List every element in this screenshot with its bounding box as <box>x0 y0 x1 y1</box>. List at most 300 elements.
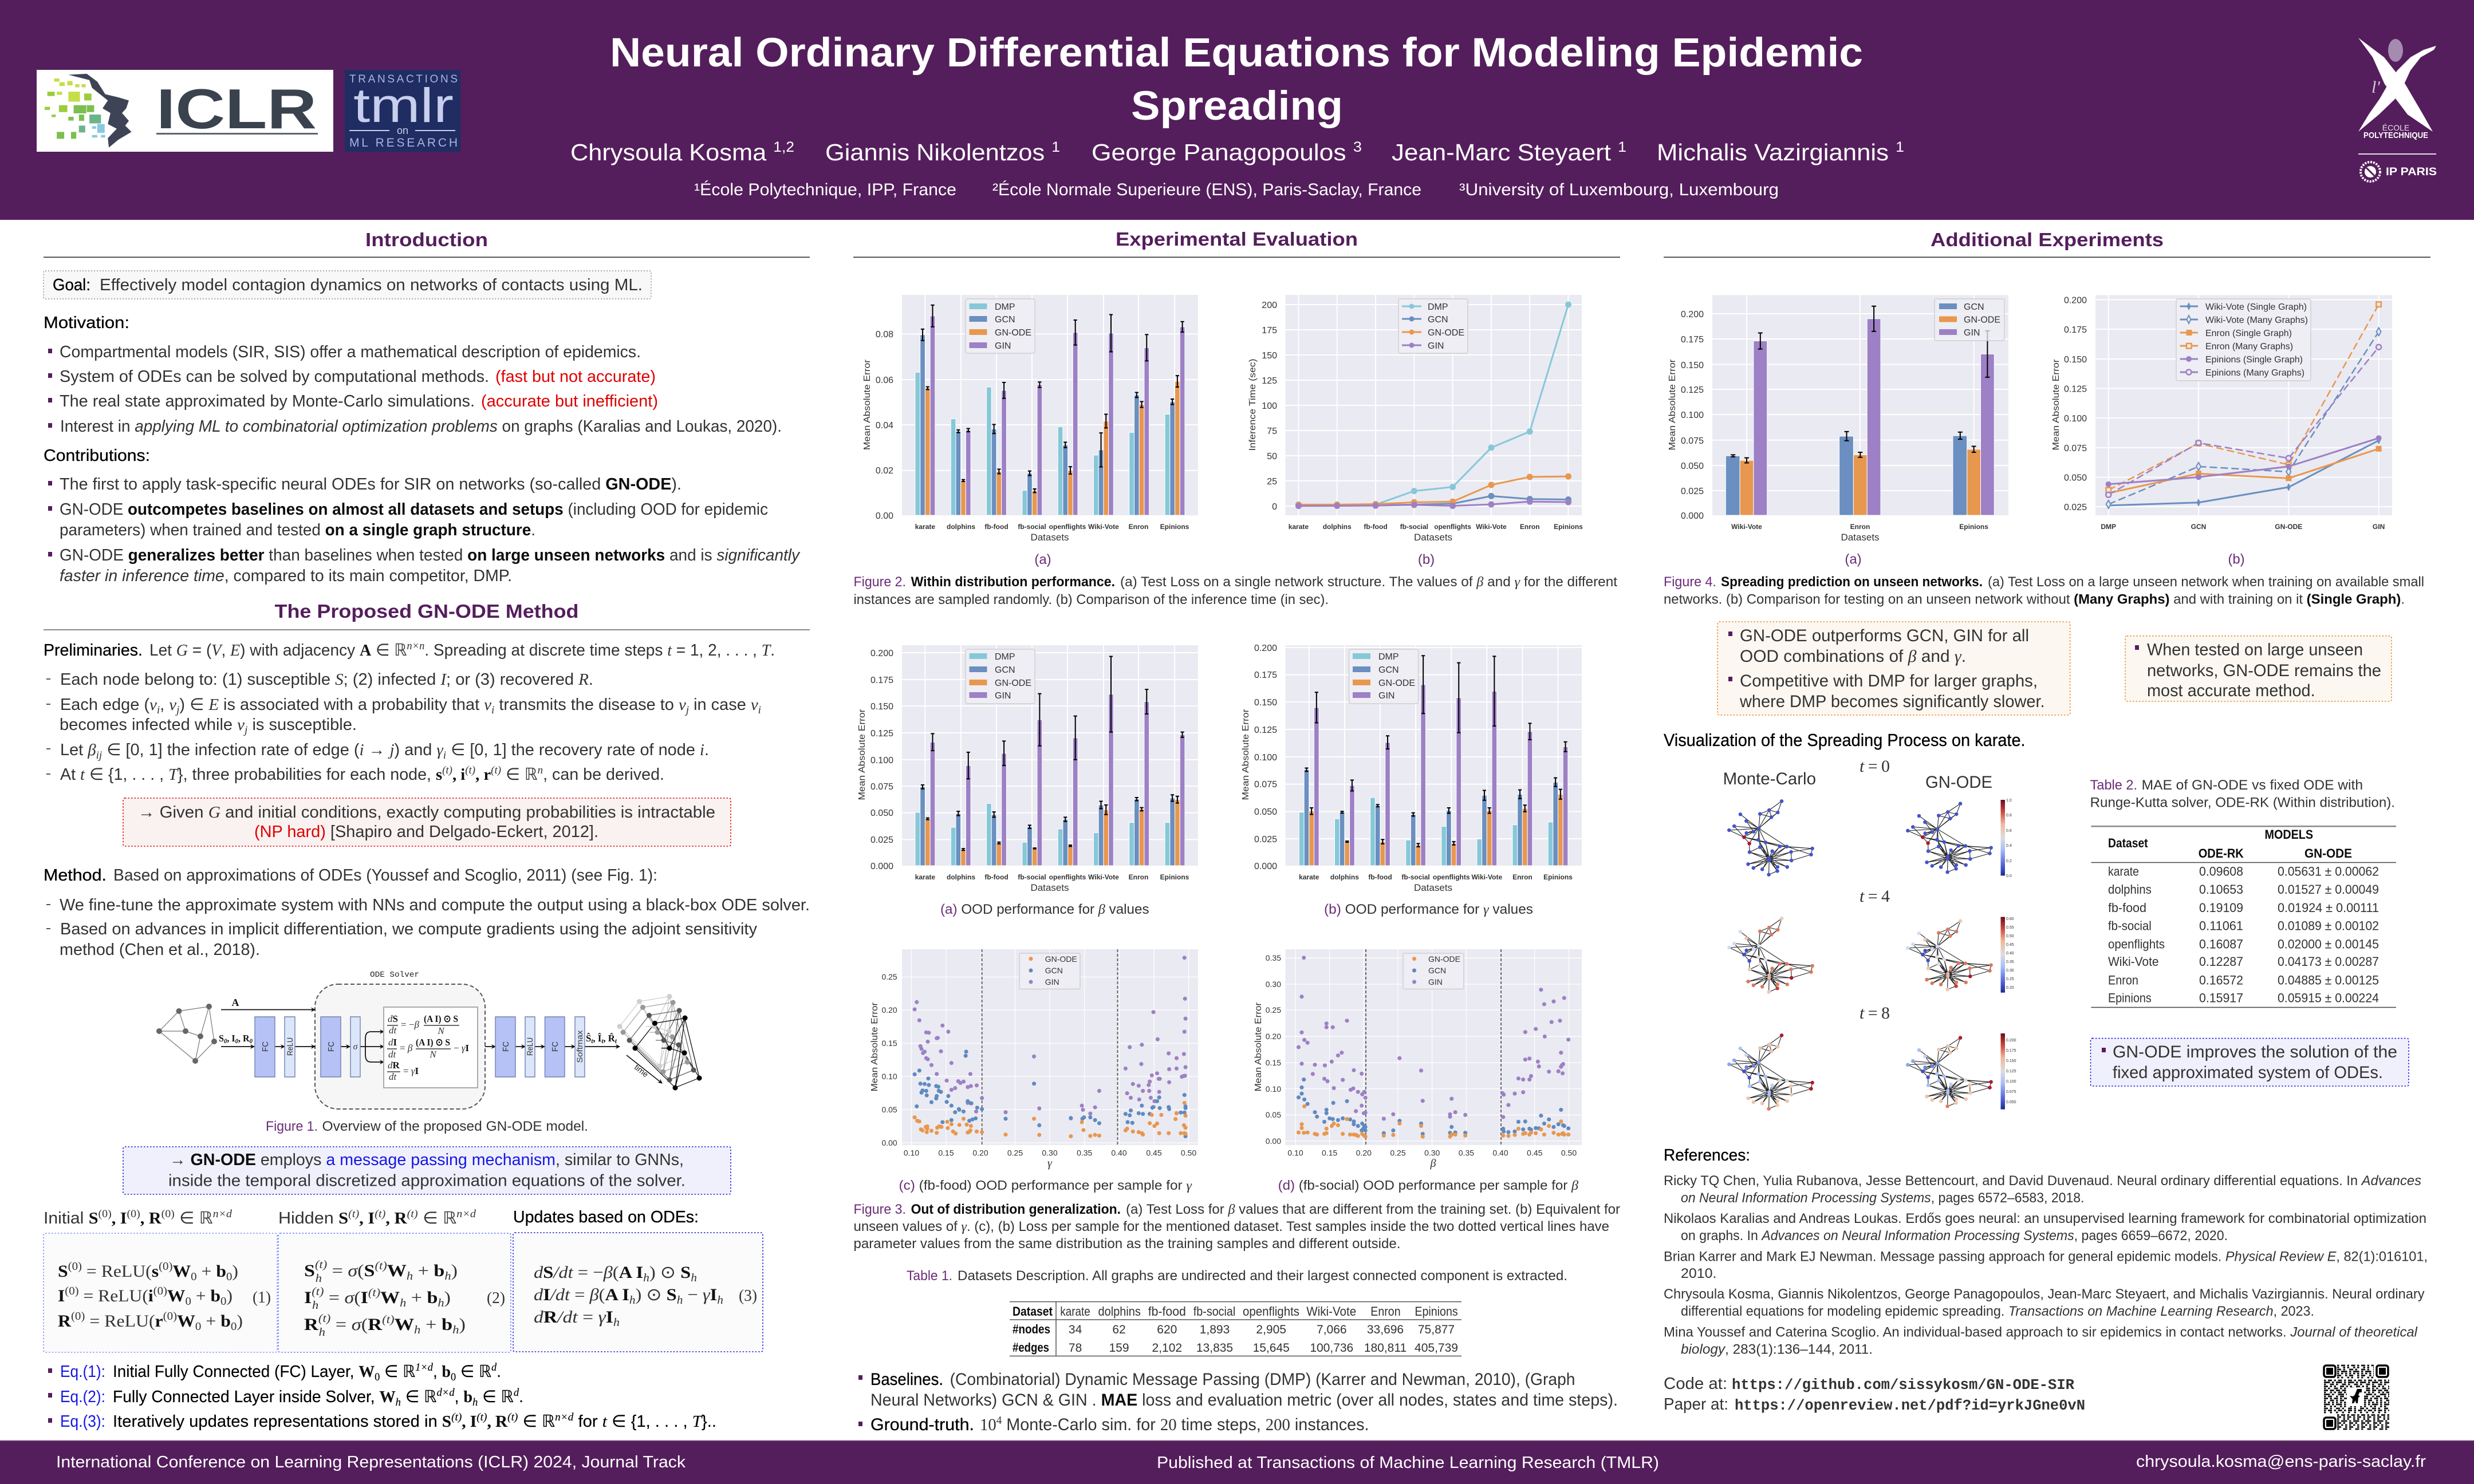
references <box>1664 1146 2428 1357</box>
preliminaries: v <box>169 696 176 714</box>
callout: OOD and DMP summary: where DMP becomes significantly slower. <box>1739 692 2045 711</box>
equation notes: , I <box>462 1412 476 1431</box>
chart: OOD performance for beta: 0.025 <box>870 835 893 845</box>
equation box 2: W <box>395 1315 414 1334</box>
chart: OOD performance for gamma: dolphins <box>1330 873 1359 881</box>
table 2: MAE comparison: 0.19109 <box>2199 901 2243 915</box>
colorbar t=0: 1.0 <box>2006 799 2012 803</box>
equation notes: Eq.(3): <box>60 1412 105 1431</box>
table 1: datasets: 180,811 <box>1364 1341 1407 1355</box>
chart: scatter fb-social beta: 0.15 <box>1266 1058 1281 1067</box>
chart: figure 4b lines: 0.050 <box>2064 473 2087 483</box>
chart: figure 4a bars: 0.025 <box>1681 487 1704 496</box>
chart: figure 2a test loss bars: DMP <box>995 302 1015 312</box>
affiliations: ¹École Polytechnique, IPP, France <box>694 180 956 199</box>
chart: figure 2a test loss bars: GN-ODE <box>995 328 1031 338</box>
panel: introduction <box>44 229 810 585</box>
table 1: datasets: 78 <box>1069 1341 1082 1355</box>
authors: 1 <box>1896 139 1904 155</box>
references: biology, 283(1):136–144, 2011. <box>1681 1342 1873 1357</box>
callout: GN-ODE improves: GN-ODE improves the solution of the <box>2113 1043 2397 1061</box>
caption: table 2: MAE of GN-ODE vs fixed ODE with <box>2142 777 2363 793</box>
baselines and ground-truth notes <box>858 1370 1618 1434</box>
table 2: MAE comparison: 0.16087 <box>2199 937 2243 952</box>
code and paper links: https://openreview.net/pdf?id=yrkJGne0vN <box>1735 1398 2085 1414</box>
chart: figure 4a bars: 0.000 <box>1681 511 1704 521</box>
chart: figure 4b lines: 0.200 <box>2064 295 2087 306</box>
column labels: t = 8 <box>1860 1004 1890 1023</box>
equation notes: h <box>472 1396 478 1408</box>
affiliations: ²École Normale Superieure (ENS), Paris-Saclay, France <box>992 180 1421 199</box>
table 2: MAE comparison: 0.10653 <box>2199 882 2243 897</box>
equation box 2: h <box>316 1272 322 1285</box>
equation box 1: (0) <box>153 1285 167 1297</box>
chart: scatter fb-social beta: GIN <box>1428 977 1443 986</box>
equation headings: (t) <box>348 1208 359 1220</box>
table 1: datasets: 2,102 <box>1152 1341 1182 1355</box>
preliminaries: , r <box>475 765 491 784</box>
chart: figure 2b inference time lines: Enron <box>1520 523 1540 531</box>
chart: scatter fb-social beta <box>1254 949 1582 1170</box>
references: Ricky TQ Chen, Yulia Rubanova, Jesse Bettencourt, and David Duvenaud. Neural ordinary differential equations. In Advances <box>1664 1173 2421 1189</box>
preliminaries: E is associated with a probability that v <box>208 696 491 714</box>
chart: OOD performance for gamma: Mean Absolute Error <box>1241 709 1251 800</box>
preliminaries: v <box>679 696 686 714</box>
chart: scatter fb-food gamma: 0.25 <box>1007 1148 1023 1158</box>
chart: figure 4a bars: 0.200 <box>1681 310 1704 319</box>
equation box 2: ) <box>444 1288 451 1307</box>
chart: scatter fb-food gamma: 0.00 <box>881 1138 897 1147</box>
colorbar t=4: 0.55 <box>2006 926 2014 930</box>
equation notes: n×d <box>555 1411 574 1423</box>
equation box 2: (t) <box>375 1260 387 1272</box>
preliminaries: v <box>751 696 758 714</box>
logo: TMLR: on <box>397 125 408 136</box>
table 2: MAE comparison: Enron <box>2108 973 2138 987</box>
contributions list: faster in inference time, compared to its main competitor, DMP. <box>60 567 512 585</box>
figure 1: architecture diagram: FC <box>550 1041 560 1052</box>
chart: scatter fb-social beta: GN-ODE <box>1428 954 1460 964</box>
chart: scatter fb-food gamma: 0.05 <box>881 1105 897 1114</box>
figure 1: architecture diagram: 0 <box>235 1038 238 1045</box>
chart: figure 2b inference time lines: 175 <box>1262 326 1277 336</box>
equation box 2: h <box>407 1270 413 1282</box>
callout: unseen networks: networks, GN-ODE remains the <box>2147 661 2381 680</box>
caption: figure 3: Out of distribution generalization. <box>911 1202 1121 1217</box>
code and paper links: Code at: <box>1664 1375 1727 1393</box>
caption: table 2: Table 2. <box>2090 777 2137 793</box>
equations box: dt <box>389 1071 397 1082</box>
chart: OOD performance for beta: GN-ODE <box>995 678 1031 688</box>
colorbar t=4: 0.60 <box>2006 917 2014 921</box>
caption: scatter d: (d) (fb-social) OOD performance per sample for β <box>1278 1178 1579 1193</box>
arrows <box>221 1010 620 1062</box>
equation notes: (t) <box>476 1411 487 1423</box>
equation headings: , I <box>359 1209 375 1228</box>
preliminaries: in case <box>689 696 751 714</box>
chart: OOD performance for beta: 0.150 <box>870 702 893 712</box>
preliminaries: (t) <box>491 764 501 776</box>
equation box 1: = ReLU( <box>85 1312 155 1331</box>
equation headings: , R <box>140 1209 162 1228</box>
callout: NP hard: (NP hard) [Shapiro and Delgado-Eckert, 2012]. <box>254 823 598 841</box>
chart: scatter fb-food gamma: 0.20 <box>881 1005 897 1015</box>
equation box 3: h <box>691 1272 697 1284</box>
equation box 1: (0) <box>68 1260 82 1273</box>
equation box 1: ) <box>237 1312 243 1331</box>
chart: figure 2a test loss bars: fb-social <box>1018 523 1046 531</box>
heading: additional experiments: Additional Experiments <box>1931 229 2164 250</box>
chart: OOD performance for beta: GCN <box>995 665 1015 675</box>
authors <box>570 139 1904 165</box>
chart: OOD performance for gamma: 0.025 <box>1254 835 1277 844</box>
motivation list: (fast but not accurate) <box>495 368 656 386</box>
chart: OOD performance for beta: 0.125 <box>870 729 893 739</box>
caption: table 2 <box>2090 777 2395 811</box>
equation notes: d <box>491 1361 497 1374</box>
chart: figure 2b inference time lines: Epinions <box>1554 523 1583 531</box>
colorbar t=4 <box>2001 917 2014 993</box>
table 2: MAE comparison <box>2091 826 2396 1008</box>
chart: OOD performance for gamma: 0.200 <box>1254 644 1277 653</box>
equation box 2 <box>278 1233 511 1352</box>
logo: TMLR: ML RESEARCH <box>349 136 458 149</box>
chart: figure 4b lines: Mean Absolute Error <box>2051 359 2061 450</box>
chart: OOD performance for beta: fb-social <box>1018 873 1046 881</box>
equation box 1: (0) <box>65 1285 79 1297</box>
equation box 2: (t) <box>318 1312 330 1325</box>
equation box 1: (0) <box>159 1260 172 1273</box>
chart: scatter fb-social beta: 0.35 <box>1266 953 1281 962</box>
equation box 2: (t) <box>382 1313 395 1326</box>
authors: Jean-Marc Steyaert <box>1392 139 1597 165</box>
colorbar t=4: 0.30 <box>2006 969 2014 973</box>
table 1: datasets: 100,736 <box>1310 1341 1353 1355</box>
temporal output graph: time <box>633 1063 651 1079</box>
colorbar t=8: 0.200 <box>2006 1039 2016 1043</box>
table 1: datasets: 62 <box>1112 1323 1126 1336</box>
table 2: MAE comparison: 0.01527 ± 0.00049 <box>2278 882 2379 897</box>
table 1: datasets: 2,905 <box>1256 1323 1286 1336</box>
caption: 4(b): (b) <box>2228 552 2245 567</box>
figure 1: architecture diagram: A <box>231 997 239 1008</box>
callout: NP hard: → Given G and initial conditions, exactly computing probabilities is intractable <box>138 803 715 822</box>
chart: figure 4b lines: GN-ODE <box>2275 523 2302 531</box>
graph: GN-ODE t=0 <box>1908 804 1991 872</box>
equation box 2: b <box>427 1288 438 1307</box>
chart: OOD performance for gamma: 0.000 <box>1254 862 1277 871</box>
equation box 2: σ(I <box>345 1288 367 1307</box>
table 2: MAE comparison: 0.05631 ± 0.00062 <box>2278 864 2379 878</box>
preliminaries: (t) <box>442 764 452 776</box>
preliminaries: ∈ [0, 1] the infection rate of edge ( <box>102 741 360 759</box>
figure 1: architecture diagram: t <box>615 1038 617 1045</box>
colorbar t=8: 0.150 <box>2006 1059 2016 1063</box>
authors: 1,2 <box>773 139 794 155</box>
chart: OOD performance for beta: 0.100 <box>870 756 893 765</box>
equation box 2: h <box>312 1299 318 1312</box>
equation headings: , R <box>385 1209 408 1228</box>
table 1: datasets: 7,066 <box>1317 1323 1347 1336</box>
preliminaries: At t ∈ {1, . . . , T}, three probabilities for each node, s <box>60 765 442 784</box>
chart: figure 4b lines: 0.125 <box>2064 385 2087 394</box>
table 2: MAE comparison: Dataset <box>2108 836 2148 850</box>
preliminaries: (t) <box>465 764 475 776</box>
chart: figure 2b inference time lines: karate <box>1289 523 1309 531</box>
chart: OOD performance for beta: 0.050 <box>870 808 893 818</box>
equation box 1: r <box>155 1312 163 1331</box>
contributions list: parameters) when trained and tested on a single graph structure. <box>60 521 535 539</box>
preliminaries: , <box>160 696 169 714</box>
equation box 2: (t) <box>312 1285 324 1298</box>
graph: Monte-Carlo t=4 <box>1729 918 1813 992</box>
caption: figure 4: Figure 4. <box>1664 574 1716 590</box>
preliminaries: is susceptible. <box>247 716 357 734</box>
contributions list: GN-ODE outcompetes baselines on almost all datasets and setups (including OOD for epidemic <box>60 500 768 519</box>
table 2: MAE comparison: ODE-RK <box>2199 846 2244 861</box>
equation box 2: = <box>324 1288 345 1307</box>
chart: OOD performance for gamma: 0.050 <box>1254 807 1277 817</box>
chart: OOD performance for beta: GIN <box>995 691 1011 701</box>
header band <box>0 0 2474 220</box>
motivation list: The real state approximated by Monte-Carlo simulations. <box>60 392 475 411</box>
caption: OOD gamma: (b) OOD performance for γ values <box>1324 902 1533 917</box>
chart: figure 4b lines: GCN <box>2191 523 2206 531</box>
equation box 1: 0 <box>226 1270 233 1283</box>
colorbar t=8: 0.075 <box>2006 1090 2016 1094</box>
method text: Method. <box>44 866 107 885</box>
chart: figure 2b inference time lines: 0 <box>1272 502 1277 512</box>
chart: figure 4b lines: Epinions (Single Graph) <box>2205 355 2303 365</box>
colorbar t=8: 0.175 <box>2006 1049 2016 1053</box>
chart: OOD performance for gamma <box>1241 644 1582 893</box>
chart: scatter fb-food gamma: 0.10 <box>881 1072 897 1081</box>
equation box 3: h <box>643 1272 649 1284</box>
chart: figure 2b inference time lines: 125 <box>1262 376 1277 386</box>
preliminaries: j <box>175 704 179 716</box>
baselines and ground-truth notes: (Combinatorial) Dynamic Message Passing (DMP) (Karrer and Newman, 2010), (Graph <box>950 1370 1575 1389</box>
preliminaries: Let β <box>60 741 96 759</box>
chart: figure 4a bars: 0.075 <box>1681 436 1704 446</box>
equation box 2: h <box>319 1326 325 1339</box>
equation box 2: = <box>330 1315 352 1334</box>
chart: figure 2b inference time lines: openflights <box>1434 523 1471 531</box>
logo: TMLR: TRANSACTIONS <box>349 73 458 85</box>
equation box 3: h <box>629 1294 636 1307</box>
method text: Based on advances in implicit differentiation, we compute gradients using the adjoint sensitivity <box>60 920 757 938</box>
chart: scatter fb-food gamma: 0.15 <box>938 1148 954 1158</box>
equations box: = γI <box>403 1065 419 1076</box>
chart: OOD performance for gamma: Enron <box>1512 873 1533 881</box>
chart: scatter fb-food gamma: GIN <box>1045 977 1059 986</box>
figure 1: architecture diagram: ReLU <box>285 1037 294 1056</box>
chart: OOD performance for gamma: 0.150 <box>1254 698 1277 708</box>
equation notes: (t) <box>507 1411 518 1423</box>
table 1: datasets: openflights <box>1243 1304 1299 1319</box>
chart: scatter fb-social beta: 0.30 <box>1266 980 1281 989</box>
preliminaries: n×n <box>407 640 424 652</box>
equations box: (A I) ⊙ S <box>416 1037 450 1048</box>
chart: figure 2b inference time lines: GIN <box>1428 341 1444 351</box>
equation box 2: S <box>304 1261 315 1280</box>
table 1: datasets: 13,835 <box>1196 1341 1233 1355</box>
input graph <box>159 1007 214 1061</box>
colorbar t=0 <box>2001 799 2012 878</box>
chart: figure 2b inference time lines: GN-ODE <box>1428 328 1464 338</box>
equation box 1: W <box>167 1286 186 1305</box>
figure 1: architecture diagram: , I <box>227 1033 235 1044</box>
equation box 1: b <box>211 1286 220 1305</box>
references: Mina Youssef and Caterina Scoglio. An individual-based approach to sir epidemics in contact networks. Journal of theoretical <box>1664 1324 2418 1340</box>
table 2: MAE comparison: openflights <box>2108 937 2165 952</box>
baselines and ground-truth notes: Ground-truth. <box>870 1415 974 1434</box>
chart: OOD performance for beta: 0.200 <box>870 649 893 658</box>
chart: figure 4a bars: Enron <box>1850 523 1870 531</box>
colorbar t=4: 0.40 <box>2006 952 2014 956</box>
equation box 2: h <box>438 1297 444 1309</box>
chart: OOD performance for gamma: fb-food <box>1368 873 1392 881</box>
references: References: <box>1664 1146 1750 1165</box>
references: on Neural Information Processing Systems, pages 6572–6583, 2018. <box>1681 1190 2085 1206</box>
equation notes: , R <box>487 1412 508 1431</box>
logo: TMLR: tmlr <box>353 78 454 132</box>
caption: table 1: Table 1. <box>907 1268 952 1284</box>
references: differential equations for modeling epidemic spreading. Transactions on Machine Learning Research, 2023. <box>1681 1304 2314 1319</box>
chart: figure 2a test loss bars: dolphins <box>947 523 975 531</box>
preliminaries: i <box>491 704 494 716</box>
equations box: = −β <box>401 1019 419 1030</box>
caption: figure 3: parameter values from the same distribution as the training samples and different outside. <box>853 1236 1401 1252</box>
caption: figure 2 <box>853 574 1617 607</box>
motivation list: Compartmental models (SIR, SIS) offer a mathematical description of epidemics. <box>60 343 641 361</box>
heading: introduction: Introduction <box>365 229 488 250</box>
chart: figure 2b inference time lines: Wiki-Vote <box>1476 523 1507 531</box>
figure 1 caption: Overview of the proposed GN-ODE model. <box>322 1119 588 1134</box>
equation headings: , I <box>112 1209 127 1228</box>
chart: scatter fb-social beta: Mean Absolute Error <box>1254 1002 1263 1091</box>
table 1: datasets: dolphins <box>1098 1304 1141 1319</box>
logo: Ecole Polytechnique: POLYTECHNIQUE <box>2363 131 2428 140</box>
chart: scatter fb-social beta: 0.10 <box>1287 1148 1303 1158</box>
figure 1: architecture diagram: 0 <box>250 1038 253 1045</box>
chart: figure 4b lines: Epinions (Many Graphs) <box>2205 368 2304 378</box>
authors: Michalis Vazirgiannis <box>1657 139 1874 165</box>
equation box 3: dR/dt = γI <box>534 1308 612 1327</box>
chart: figure 4a bars <box>1668 295 2008 543</box>
preliminaries: t = 1, 2, . . . , T. <box>667 641 775 660</box>
equation box 3: (3) <box>739 1286 757 1305</box>
equation box 3: S <box>680 1263 691 1282</box>
figure 1: architecture diagram: S <box>219 1033 224 1044</box>
chart: figure 2b inference time lines: Datasets <box>1414 532 1452 543</box>
logo: Ecole Polytechnique: ÉCOLE <box>2382 123 2409 132</box>
equation box 2: σ(S <box>348 1261 373 1280</box>
figure 1 caption: Figure 1. <box>266 1119 318 1134</box>
table 2: MAE comparison: 0.04173 ± 0.00287 <box>2278 954 2379 969</box>
equation headings: (t) <box>375 1208 385 1220</box>
figure 1: architecture diagram: σ <box>353 1042 359 1052</box>
preliminaries: Each node belong to: (1) susceptible S; (2) infected I; or (3) recovered R. <box>60 670 593 689</box>
chart: figure 2b inference time lines: fb-food <box>1364 523 1388 531</box>
caption: figure 3 <box>853 1202 1620 1252</box>
chart: scatter fb-social beta: 0.00 <box>1266 1136 1281 1146</box>
caption: table 2: Runge-Kutta solver, ODE-RK (Within distribution). <box>2090 795 2395 811</box>
chart: scatter fb-food gamma: γ <box>1047 1157 1053 1170</box>
chart: scatter fb-food gamma <box>870 949 1198 1170</box>
logo: Ecole Polytechnique: l' <box>2371 78 2380 97</box>
equation notes: , <box>433 1363 442 1381</box>
table 2: MAE comparison: Wiki-Vote <box>2108 954 2159 969</box>
chart: figure 2b inference time lines: fb-social <box>1400 523 1428 531</box>
equation box 2: + <box>406 1288 427 1307</box>
table 2: MAE comparison: 0.09608 <box>2199 864 2243 878</box>
equations box: dt <box>388 1049 396 1060</box>
chart: scatter fb-social beta: 0.35 <box>1459 1148 1474 1158</box>
equation box 2: b <box>442 1315 452 1334</box>
authors: George Panagopoulos <box>1092 139 1326 165</box>
table 1: datasets: 159 <box>1109 1341 1129 1355</box>
chart: figure 2b inference time lines: 150 <box>1262 351 1277 361</box>
caption: figure 4: (a) Test Loss on a large unseen network when training on available small <box>1988 574 2424 590</box>
table 1: datasets: #nodes <box>1013 1322 1050 1336</box>
equation headings: (0) <box>161 1208 175 1220</box>
chart: OOD performance for beta: Epinions <box>1160 873 1189 881</box>
callout: GN-ODE improves: fixed approximated system of ODEs. <box>2113 1063 2383 1082</box>
goal box: Effectively model contagion dynamics on networks of contacts using ML. <box>100 276 643 294</box>
chart: scatter fb-food gamma: 0.40 <box>1111 1148 1127 1158</box>
equation notes: ∈ ℝ <box>456 1363 491 1381</box>
colorbar t=8: 0.125 <box>2006 1069 2016 1073</box>
preliminaries: , can be derived. <box>543 765 664 784</box>
colorbar t=4: 0.25 <box>2006 977 2014 981</box>
chart: figure 2a test loss bars: openflights <box>1049 523 1086 531</box>
equation box 2: + <box>420 1315 442 1334</box>
table 1: datasets: Enron <box>1370 1304 1401 1319</box>
chart: figure 2b inference time lines: 25 <box>1267 477 1277 487</box>
chart: OOD performance for gamma: 0.100 <box>1254 753 1277 763</box>
references: 2010. <box>1681 1266 1717 1281</box>
chart: figure 2a test loss bars: Epinions <box>1160 523 1189 531</box>
chart: scatter fb-social beta: 0.25 <box>1390 1148 1406 1158</box>
figure 1: architecture diagram: Ŝ <box>586 1033 591 1044</box>
chart: figure 2a test loss bars: GCN <box>995 315 1015 325</box>
logo: Ecole Polytechnique: IP PARIS <box>2386 166 2437 178</box>
table 2: MAE comparison: 0.16572 <box>2199 973 2243 987</box>
table 2: MAE comparison: fb-food <box>2108 901 2146 915</box>
figure 1: architecture diagram: t <box>601 1038 604 1045</box>
callout: OOD and DMP summary: OOD combinations of β and γ. <box>1740 647 1966 666</box>
chart: scatter fb-food gamma: Mean Absolute Error <box>870 1002 880 1091</box>
caption: (b): (b) <box>1418 552 1435 567</box>
colorbar t=4: 0.45 <box>2006 943 2014 947</box>
table 2: MAE comparison: 0.02000 ± 0.00145 <box>2278 937 2379 952</box>
preliminaries: Let G = (V, E) with adjacency A ∈ ℝ <box>149 641 408 660</box>
method text: We fine-tune the approximate system with NNs and compute the output using a black-box ODE solver. <box>60 896 810 914</box>
QR code <box>2323 1364 2389 1430</box>
chart: figure 4a bars: Epinions <box>1959 523 1988 531</box>
table 1: datasets: karate <box>1060 1304 1090 1319</box>
chart: figure 2a test loss bars: GIN <box>995 341 1011 351</box>
preliminaries: n <box>538 764 543 776</box>
chart: figure 4b lines: 0.175 <box>2064 325 2087 335</box>
title <box>610 30 1863 129</box>
caption: figure 2: (a) Test Loss on a single network structure. The values of β and γ for the different <box>1120 574 1617 590</box>
preliminaries: ij <box>96 749 102 761</box>
caption: figure 3: Figure 3. <box>853 1202 906 1217</box>
caption: figure 3: unseen values of γ. (c), (b) Loss per sample for the mentioned dataset. Test samples inside the two dotted vertical lines have <box>853 1219 1609 1234</box>
chart: scatter fb-social beta: 0.30 <box>1424 1148 1440 1158</box>
baselines and ground-truth notes: Neural Networks) GCN & GIN . MAE loss and evaluation metric (over all nodes, states and time steps). <box>870 1391 1618 1410</box>
